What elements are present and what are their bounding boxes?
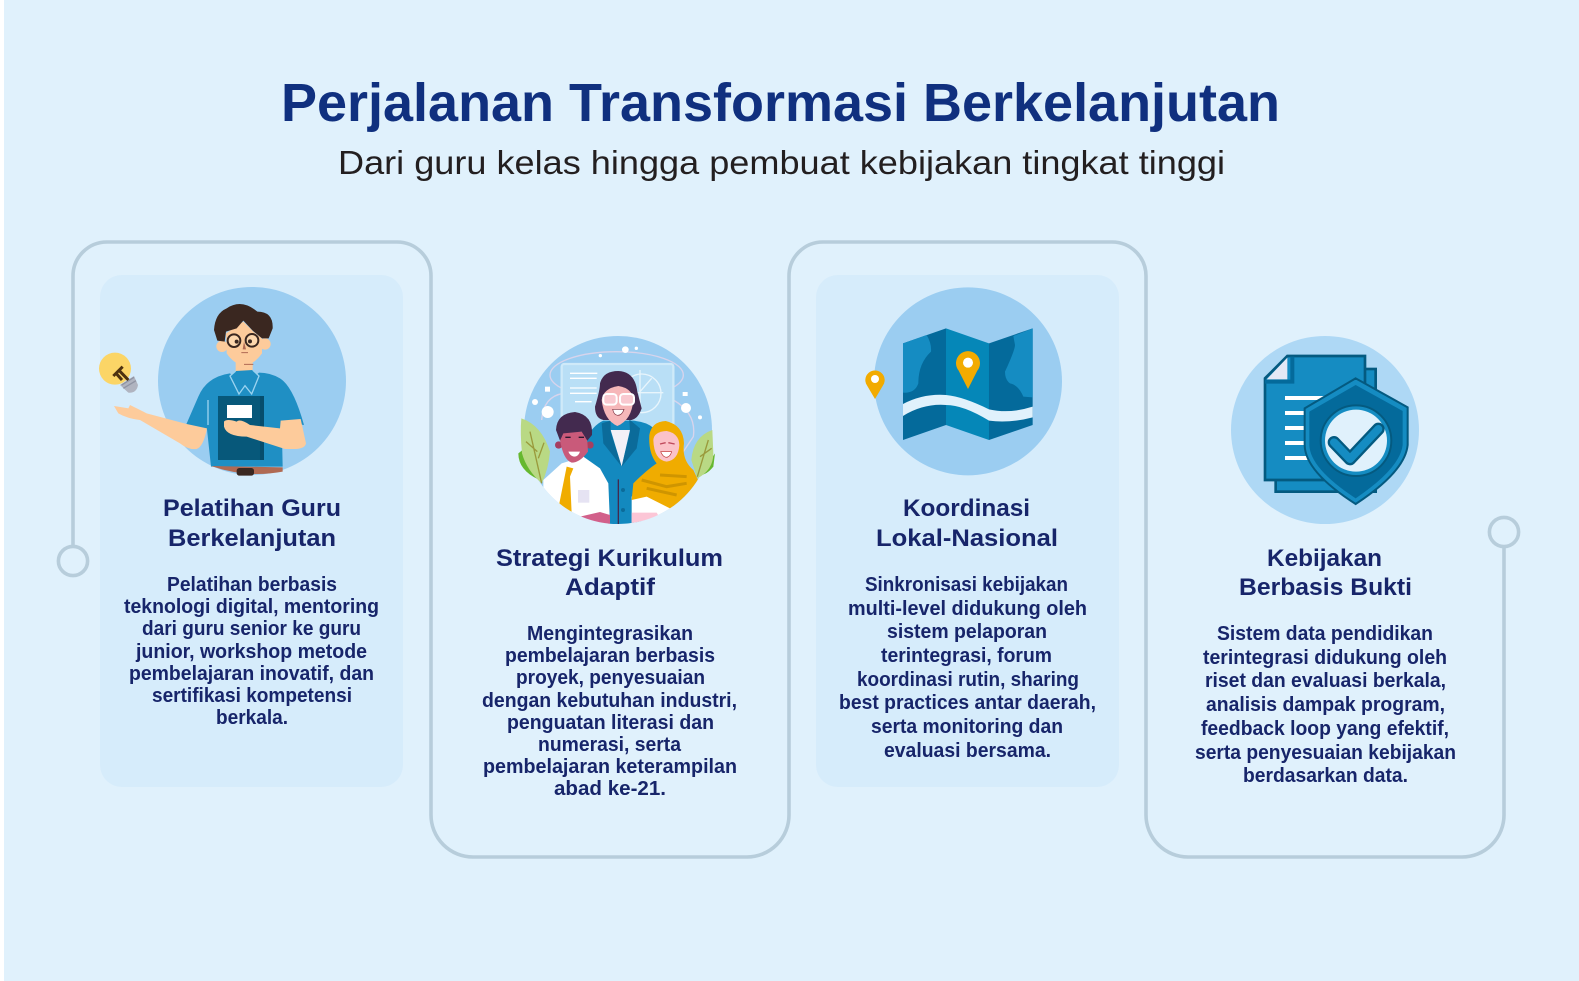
panel 4 body text: berdasarkan data.	[1243, 765, 1408, 787]
panel 1 heading: Berkelanjutan	[168, 525, 336, 552]
panel 4 body text: serta penyesuaian kebijakan	[1195, 742, 1456, 764]
panel 1: teacher training	[99, 275, 403, 787]
panel 1 heading: Pelatihan Guru	[163, 495, 341, 522]
panel 3 body text: sistem pelaporan	[887, 621, 1047, 643]
icon: folded map with pins	[865, 287, 1062, 475]
title: Perjalanan Transformasi Berkelanjutan	[281, 73, 1280, 133]
panel 4 body text: Sistem data pendidikan	[1217, 623, 1433, 645]
panel 2 body text: penguatan literasi dan	[507, 712, 714, 734]
panel 2 body text	[482, 623, 737, 800]
panel 3: local-national coordination	[816, 275, 1119, 787]
panel 3 heading: Lokal-Nasional	[876, 525, 1058, 552]
panel 4 body text: terintegrasi didukung oleh	[1203, 647, 1447, 669]
panel 2 body text: Mengintegrasikan	[527, 623, 693, 645]
panel 1 body text: sertifikasi kompetensi	[152, 685, 352, 707]
icon: documents and shield with check	[1231, 336, 1419, 524]
panel 2 body text: proyek, penyesuaian	[516, 667, 705, 689]
panel 3 body text: Sinkronisasi kebijakan	[865, 574, 1068, 596]
panel 2 body text: numerasi, serta	[538, 734, 682, 756]
panel 3 heading	[876, 495, 1058, 552]
panel 3 heading: Koordinasi	[903, 495, 1030, 522]
panel 2 body text: abad ke-21.	[554, 778, 666, 800]
panel 2 body text: dengan kebutuhan industri,	[482, 690, 737, 712]
panel 2 heading	[496, 545, 723, 601]
icon: teacher holding book with light bulb	[99, 287, 346, 476]
panel 3 body text: terintegrasi, forum	[881, 645, 1052, 667]
connector path	[58, 242, 1519, 857]
panel 4 body text: riset dan evaluasi berkala,	[1205, 670, 1446, 692]
panel 3 body text: serta monitoring dan	[871, 716, 1063, 738]
panel 4: evidence-based policy	[1195, 336, 1456, 787]
panel 2 heading: Strategi Kurikulum	[496, 545, 723, 572]
panel 1 body text: berkala.	[216, 707, 288, 729]
panel 3 body text: koordinasi rutin, sharing	[857, 669, 1079, 691]
panel 3 background	[816, 275, 1119, 787]
panel 4 heading: Berbasis Bukti	[1239, 574, 1412, 601]
panel 1 body text: pembelajaran inovatif, dan	[129, 663, 374, 685]
panel 4 heading: Kebijakan	[1267, 545, 1382, 572]
panel 2 heading: Adaptif	[565, 574, 656, 601]
panel 2 body text: pembelajaran berbasis	[505, 645, 715, 667]
panel 4 body text	[1195, 623, 1456, 787]
panel 3 body text: evaluasi bersama.	[884, 740, 1051, 762]
subtitle: Dari guru kelas hingga pembuat kebijakan tingkat tinggi	[338, 144, 1225, 181]
panel 2: adaptive curriculum	[482, 336, 737, 800]
panel 1 body text: Pelatihan berbasis	[167, 574, 337, 596]
panel 4 body text: feedback loop yang efektif,	[1201, 718, 1449, 740]
panel 1 body text: teknologi digital, mentoring	[124, 596, 379, 618]
panel 1 body text: dari guru senior ke guru	[142, 618, 361, 640]
panel 1 body text	[124, 574, 379, 729]
panel 4 body text: analisis dampak program,	[1206, 694, 1445, 716]
panel 1 background	[100, 275, 403, 787]
panel 4 heading	[1239, 545, 1412, 601]
panel 2 body text: pembelajaran keterampilan	[483, 756, 737, 778]
panel 3 body text	[839, 574, 1096, 762]
icon: teacher and students	[518, 336, 715, 524]
panel 1 heading	[163, 495, 341, 552]
panel 1 body text: junior, workshop metode	[135, 641, 367, 663]
panel 3 body text: multi-level didukung oleh	[848, 598, 1087, 620]
panel 3 body text: best practices antar daerah,	[839, 692, 1096, 714]
